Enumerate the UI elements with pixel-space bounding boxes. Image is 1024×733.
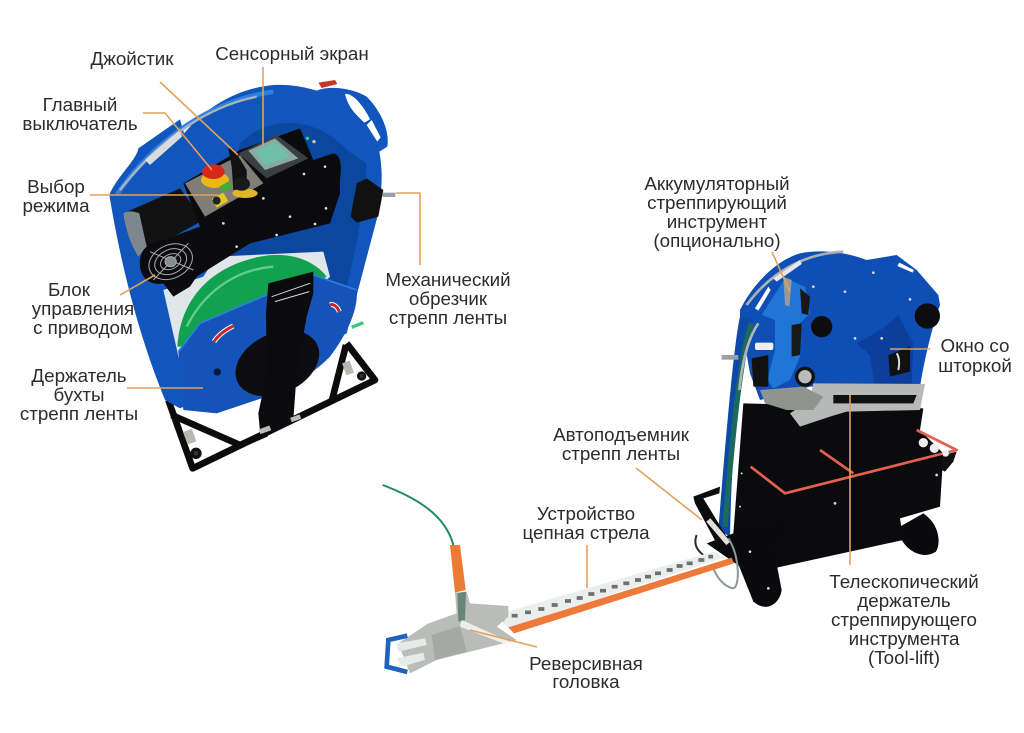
emergency stop (201, 164, 229, 188)
on/off switch (318, 80, 337, 88)
label: mechanical cutter: стрепп ленты (389, 307, 507, 328)
label: control unit: управления (32, 298, 134, 319)
cooling fan (143, 237, 198, 286)
side knob (351, 178, 395, 223)
label: shutter window: шторкой (938, 355, 1012, 376)
handle cut-outs (345, 94, 370, 123)
label: battery strapping tool: Аккумуляторный (644, 173, 790, 194)
label: reel holder: бухты (53, 384, 105, 405)
label: joystick: Джойстик (91, 48, 174, 69)
rivets (739, 271, 938, 590)
rivets (222, 165, 327, 248)
leader: mechanical cutter (396, 193, 420, 265)
rear blue plate (740, 251, 940, 400)
label: auto lift: стрепп ленты (562, 443, 680, 464)
label: reel holder: стрепп ленты (20, 403, 138, 424)
operator panel (185, 155, 263, 217)
label: main switch: Главный (43, 94, 117, 115)
orange band (508, 558, 734, 633)
back plate (109, 85, 388, 408)
casters (183, 361, 354, 445)
machine: rear view with tool and tray (693, 251, 957, 607)
leader lines (90, 67, 930, 647)
machine: front view strapping cart (109, 80, 395, 468)
leader: joystick (160, 82, 238, 155)
leader: control block (120, 275, 155, 295)
leader: chain boom (586, 545, 588, 588)
green strap tail (352, 323, 363, 327)
window with green strap reel (163, 252, 330, 363)
handle cut-outs (755, 287, 771, 311)
label: mechanical cutter: обрезчик (409, 288, 488, 309)
wheels and frame (735, 520, 790, 607)
leader: mode selector (90, 194, 218, 196)
battery tool (752, 277, 823, 410)
telescopic tool lift (790, 383, 925, 427)
label: shutter window: Окно со (941, 335, 1009, 356)
strapping boom and reversing head (383, 485, 734, 673)
label: reversing head: головка (552, 671, 620, 692)
leader: auto lift (636, 468, 702, 520)
label: telescopic tool lift: Телескопический (829, 571, 979, 592)
label: chain boom: цепная стрела (522, 522, 650, 543)
shutter window (888, 347, 910, 377)
black holder bracket (258, 272, 313, 432)
green strap (383, 485, 453, 545)
label: telescopic tool lift: (Tool-lift) (868, 647, 940, 668)
label: main switch: выключатель (22, 113, 138, 134)
label: telescopic tool lift: стреппирующего (831, 609, 977, 630)
label: reversing head: Реверсивная (529, 653, 643, 674)
label: mode selection: Выбор (27, 176, 85, 197)
label: chain boom: Устройство (537, 503, 635, 524)
leader: main switch (143, 113, 212, 170)
reversing head body (398, 592, 517, 673)
label: battery strapping tool: стреппирующий (647, 192, 787, 213)
label: auto lift: Автоподъемник (553, 424, 690, 445)
label: mode selection: режима (22, 195, 90, 216)
label: telescopic tool lift: держатель (857, 590, 951, 611)
storage box and base (707, 403, 943, 570)
central hub disc (225, 318, 330, 409)
white cable tube and ring (695, 520, 738, 588)
label: battery strapping tool: (опционально) (653, 230, 781, 251)
leader: reversing head (470, 630, 537, 647)
label: battery strapping tool: инструмент (667, 211, 768, 232)
label: control unit: с приводом (33, 317, 133, 338)
strap holder front plate (178, 275, 357, 413)
orange grip (450, 545, 466, 593)
black roller (123, 188, 203, 253)
blue jaws (387, 636, 427, 672)
leader: tool lift (849, 395, 851, 565)
leader: battery tool (772, 252, 790, 292)
base frame (168, 343, 375, 468)
leader: touch screen (262, 67, 264, 146)
label: touch screen: Сенсорный экран (215, 43, 369, 64)
chain boom (496, 552, 724, 628)
rotary knobs (811, 316, 832, 337)
red tray rim (751, 430, 957, 493)
leader: reel holder (127, 387, 203, 389)
label: mechanical cutter: Механический (385, 269, 511, 290)
label: reel holder: Держатель (31, 365, 127, 386)
joystick (228, 148, 258, 198)
control arm (140, 128, 341, 297)
left rim (718, 317, 753, 537)
label: telescopic tool lift: инструмента (849, 628, 960, 649)
label: control unit: Блок (48, 279, 91, 300)
leader: shutter window (890, 348, 930, 350)
mode selector (212, 181, 233, 208)
